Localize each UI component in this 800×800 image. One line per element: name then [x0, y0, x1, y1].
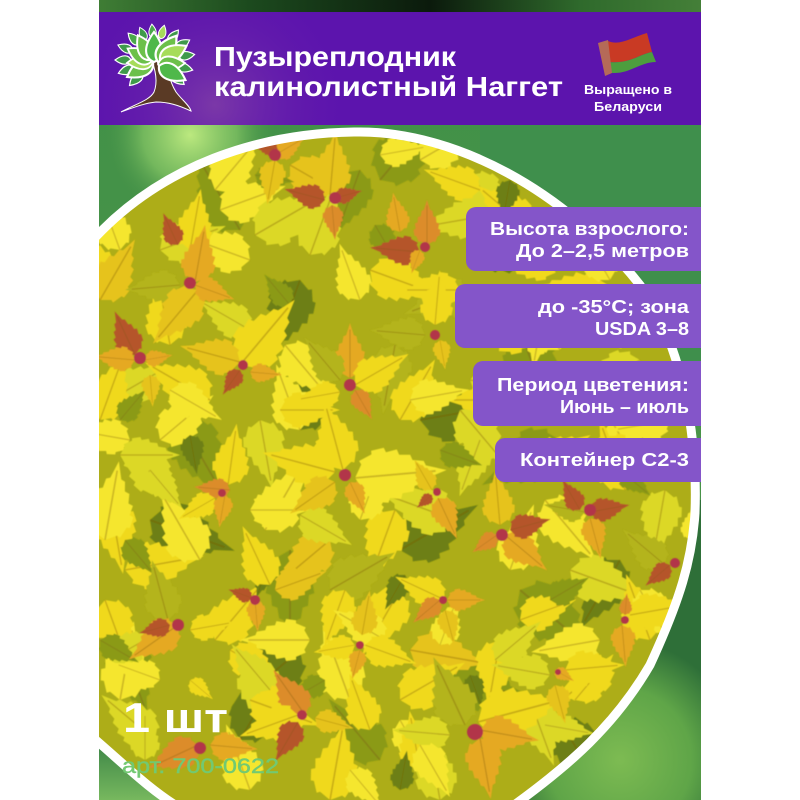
title: Пузыреплодник	[214, 41, 456, 72]
logo: tree	[115, 24, 195, 112]
shaded foliage patches	[93, 163, 658, 792]
title	[214, 41, 563, 102]
red leaf buds	[134, 149, 680, 754]
info band: container: Контейнер С2-3	[520, 449, 689, 470]
photo frame clip wrapper with golden leaves and arc	[99, 128, 700, 800]
bright filler foliage	[68, 132, 686, 800]
info band: height: Высота взрослого:	[490, 218, 689, 239]
article number: арт. 700-0622	[122, 755, 279, 778]
white arc frame lower left	[99, 737, 176, 800]
leaf rosettes	[92, 128, 704, 800]
text: grown in Belarus: Выращено в	[584, 83, 672, 97]
text: grown in Belarus: Беларуси	[594, 100, 662, 114]
title: калинолистный Наггет	[214, 71, 563, 102]
info band: height: До 2–2,5 метров	[516, 240, 689, 261]
info band: flowering: Период цветения:	[497, 374, 689, 395]
dense yellow foliage	[99, 144, 682, 800]
text: grown in Belarus	[584, 83, 672, 114]
info band: flowering: Июнь – июль	[560, 396, 689, 417]
info band: container	[495, 438, 701, 482]
info band: height	[466, 207, 701, 271]
info band: flowering	[473, 361, 701, 426]
white arc frame	[90, 132, 695, 800]
info band: hardiness	[455, 284, 701, 348]
shadow foliage	[104, 138, 630, 766]
info band: hardiness: USDA 3–8	[595, 318, 689, 339]
photo background: blurred green garden	[99, 0, 701, 800]
quantity label: 1 шт	[123, 694, 228, 741]
header banner	[99, 12, 701, 125]
photo: golden leaves in a rounded frame	[99, 136, 691, 800]
info band: hardiness: до -35°C; зона	[538, 296, 690, 317]
icon: Belarus flag	[598, 33, 656, 76]
